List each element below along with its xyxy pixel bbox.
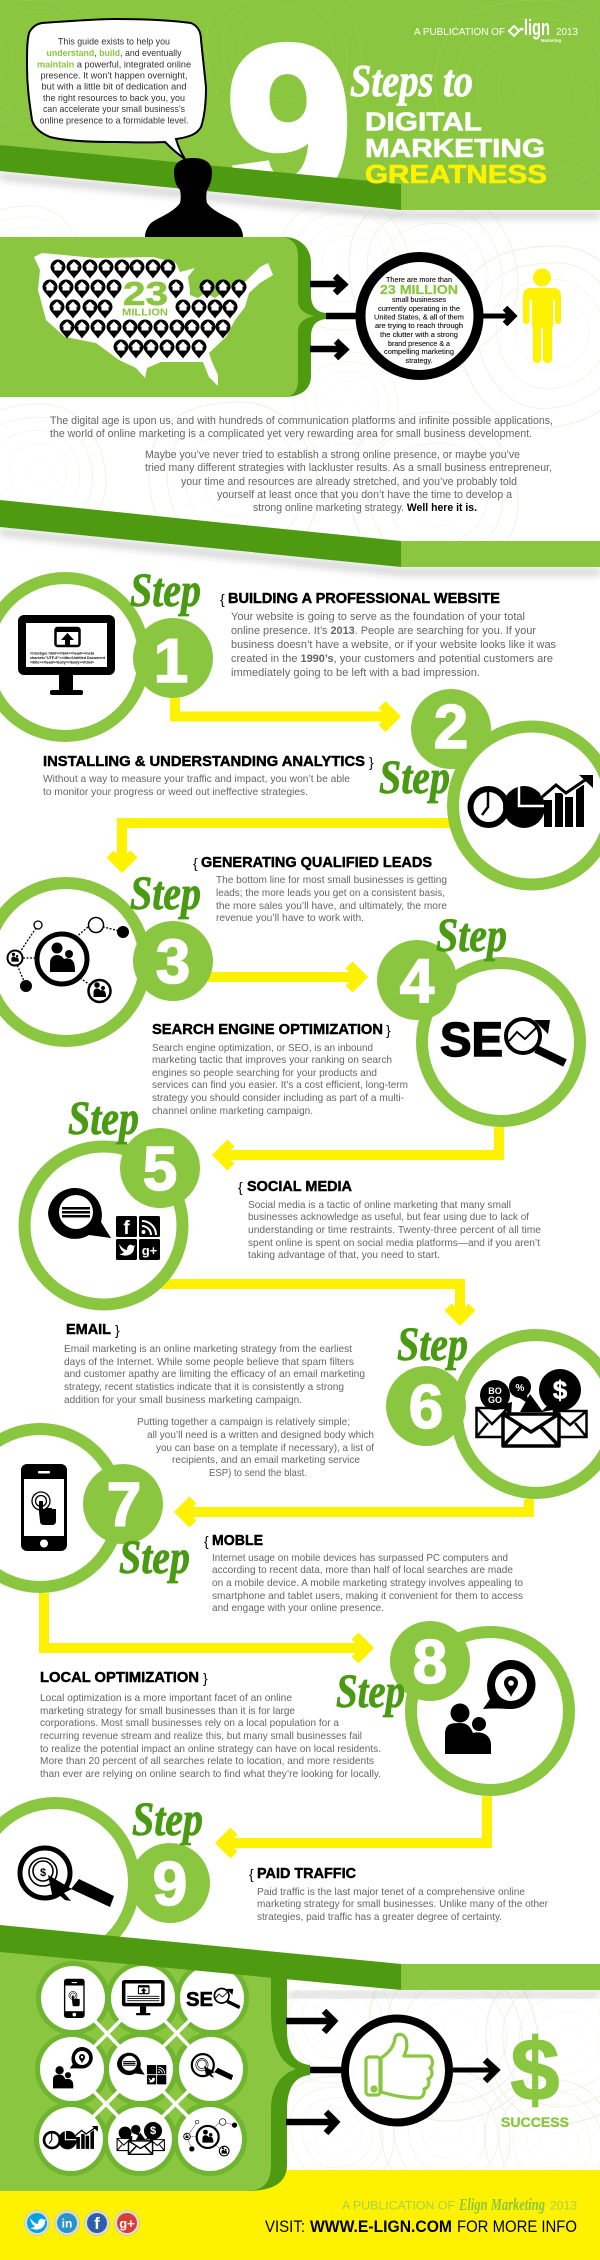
circle: step 4 <box>422 963 580 1121</box>
panel: 23 million small businesses <box>0 237 326 397</box>
script: Step: Step <box>119 1531 190 1584</box>
script: Step: Step <box>132 1793 203 1846</box>
body text: created in the 1990’s, your customers and potential customers are <box>231 653 553 665</box>
footer credit <box>342 2195 577 2214</box>
23 million label <box>122 275 168 318</box>
body text <box>64 1343 374 1479</box>
publication credit with logo: -lign <box>519 15 550 40</box>
body text: marketing strategy for small businesses. Unlike many of the other <box>257 1898 548 1910</box>
speech bubble: online presence to a formidable level. <box>40 116 188 126</box>
number badge 8 <box>390 1621 470 1701</box>
body text: leads; the more leads you get on a consistent basis, <box>216 887 445 899</box>
body text <box>248 1199 541 1261</box>
body text: ESP) to send the blast. <box>209 1467 307 1479</box>
step 1 <box>0 564 556 736</box>
map of USA <box>34 253 273 386</box>
number 1: 1 <box>154 627 188 696</box>
small icon: SEO <box>186 1988 240 2011</box>
footer credit: Elign Marketing <box>458 2195 545 2214</box>
social icons: in <box>62 2216 72 2230</box>
page background pattern <box>0 192 600 581</box>
small icon: SEO: SE <box>186 1988 213 2011</box>
body text: than ever are relying on online search to find what they’re looking for locally. <box>40 1768 381 1780</box>
body text: on a mobile device. A mobile marketing strategy involves appealing to <box>212 1577 523 1589</box>
icon: social media: f <box>123 1218 130 1239</box>
body text: taking advantage of that, you need to start. <box>248 1249 440 1261</box>
intro text: strong online marketing strategy. Well here it is. <box>253 502 477 514</box>
icon: social media <box>48 1188 160 1260</box>
body text: engines so people searching for your products and <box>152 1067 377 1079</box>
circle: step 6 <box>457 1335 600 1493</box>
step 5 <box>24 1092 541 1320</box>
speech bubble: This guide exists to help you <box>58 36 170 48</box>
arrow: thumbs up to success <box>453 2060 496 2081</box>
icon: analytics <box>470 775 593 828</box>
heading: social media: SOCIAL MEDIA <box>247 1178 352 1195</box>
icon: website monitor: charset="UTF-8"><title>Untitled Document <box>30 656 106 660</box>
number 9: 9 <box>153 1850 187 1919</box>
icon: email: % <box>516 1383 525 1394</box>
small icon: email <box>117 2122 164 2154</box>
circle: thumbs up <box>345 2018 449 2122</box>
body text: The bottom line for most small businesses is getting <box>216 874 447 886</box>
body text: immediately going to be left with a bad impression. <box>231 667 480 679</box>
header: green banner <box>0 0 600 210</box>
body text: Social media is a tactic of online marketing that many small <box>248 1199 511 1211</box>
small icon: social <box>117 2053 166 2084</box>
number badge 1 <box>133 618 213 698</box>
icon: email: BO <box>488 1386 502 1396</box>
icon: dollar sign: $ <box>511 2020 559 2119</box>
intro text: yourself at least once that you don’t have the time to develop a <box>217 489 512 501</box>
icon: thumbs up outline <box>366 2034 432 2098</box>
speech bubble <box>27 19 206 159</box>
lake <box>190 272 222 298</box>
body text: strategy, recent statistics indicate that it is consistently a strong <box>64 1381 344 1393</box>
body text <box>43 773 350 798</box>
callout circle: 23 million: brand presence & a <box>388 339 451 348</box>
intro text: The digital age is upon us, and with hundreds of communication platforms and infinite possible applications, <box>50 415 553 427</box>
icon: email <box>476 1369 586 1446</box>
intro text: Maybe you’ve never tried to establish a strong online presence, or maybe you’ve <box>145 449 520 461</box>
body text: Search engine optimization, or SEO, is an inbound <box>152 1042 373 1054</box>
number badge 2 <box>411 689 491 769</box>
body text: revenue you’ll have to work with. <box>216 912 364 924</box>
section band <box>0 500 600 567</box>
title: digital marketing greatness: MARKETING <box>365 133 545 163</box>
circle: step 2 <box>453 726 600 884</box>
icon: social media: g+ <box>142 1243 158 1258</box>
speech bubble: understand, build, and eventually <box>46 48 182 59</box>
icon: SEO magnifier <box>440 1014 565 1067</box>
location pins <box>42 260 246 358</box>
publication credit with logo: A PUBLICATION OF <box>414 26 505 38</box>
body text: addition for your small business marketing campaign. <box>64 1394 302 1406</box>
number 4: 4 <box>400 947 435 1016</box>
title: digital marketing greatness: GREATNESS <box>365 159 547 189</box>
icon: website monitor <box>18 615 115 695</box>
heading: local optimization: } <box>203 1670 208 1686</box>
title: digital marketing greatness: DIGITAL <box>365 106 482 136</box>
arrows: panel to circle <box>310 276 360 358</box>
icon: paid traffic <box>20 1848 114 1907</box>
speech bubble: maintain a powerful, integrated online <box>37 60 191 70</box>
script: Step: Step <box>68 1092 139 1145</box>
body text: according to recent data, more than half of local searches are made <box>212 1564 513 1576</box>
intro text: your time and resources are already stretched, and you’ve probably told <box>181 476 517 488</box>
number badge 4 <box>377 940 457 1020</box>
speech bubble: presence. It won’t happen overnight, <box>40 70 188 82</box>
body text <box>212 1552 523 1614</box>
callout circle: 23 million: United States, & all of them <box>374 312 464 322</box>
heading: email: EMAIL <box>66 1321 111 1338</box>
publication credit with logo: 2013 <box>556 26 578 38</box>
callout circle: 23 million: small businesses <box>392 295 446 304</box>
body text: and customer apathy are limiting the efficacy of an email marketing <box>64 1368 365 1380</box>
social icons: g+ <box>119 2216 135 2231</box>
panel: summary icons <box>0 1940 310 2191</box>
script: Step: Step <box>379 751 450 804</box>
lower band <box>0 1925 600 1990</box>
lattice lines <box>71 1998 212 2139</box>
small icon: network <box>184 2119 237 2156</box>
body text <box>257 1886 548 1923</box>
band shadow 3 <box>287 1992 600 1997</box>
arrow: step 8 to 9 <box>222 1796 487 1855</box>
intro text: tried many different strategies with lackluster results. As a small business entrepreneur, <box>145 462 552 474</box>
body text: strategy you should consider including as part of a multi- <box>152 1092 404 1104</box>
body text: Putting together a campaign is relatively simple; <box>137 1416 350 1428</box>
body text: strategies, paid traffic has a greater degree of certainty. <box>257 1911 502 1923</box>
circle: step 1 <box>0 578 144 736</box>
heading: mobile: { <box>204 1533 209 1549</box>
icon: mobile phone <box>21 1464 67 1551</box>
body text: Local optimization is a more important facet of an online <box>40 1692 292 1704</box>
body text: to realize the potential impact an online strategy can have on local residents. <box>40 1743 381 1755</box>
23 million label: 23 <box>123 275 168 312</box>
icon: email: GO <box>488 1395 502 1405</box>
number 6: 6 <box>409 1373 443 1442</box>
callout circle: 23 million: compelling marketing <box>384 347 454 356</box>
body text: online presence. It’s 2013. People are searching for you. If your <box>231 625 536 637</box>
icon: website monitor: <!doctype html><html><head><meta <box>30 652 95 656</box>
number badge 5 <box>120 1128 200 1208</box>
script: Step: Step <box>397 1318 468 1371</box>
small icon: local <box>53 2047 93 2088</box>
footer credit: 2013 <box>550 2198 577 2212</box>
small icon: email: $ <box>150 2125 156 2137</box>
number badge 9 <box>130 1843 210 1923</box>
number badge 3 <box>133 921 213 1001</box>
body text <box>231 611 556 679</box>
number 8: 8 <box>413 1628 447 1697</box>
body text: corporations. Most small businesses rely on a local population for a <box>40 1717 339 1729</box>
footer: visit link: WWW.E-LIGN.COM <box>310 2217 452 2236</box>
icon: person silhouette <box>145 158 243 237</box>
arrow: step 3 to 4 <box>208 965 362 989</box>
step 6 <box>64 1318 600 1524</box>
icon: local optimization <box>445 1660 535 1754</box>
pattern: success area background <box>287 1985 600 2170</box>
title: digital marketing greatness <box>365 106 547 189</box>
icon grid circles <box>39 1966 244 2171</box>
social icons <box>24 2210 140 2236</box>
step 2 <box>43 689 600 884</box>
footer: visit link <box>265 2217 577 2236</box>
body text <box>152 1042 408 1117</box>
body text: marketing tactic that improves your ranking on search <box>152 1054 392 1066</box>
step 9 <box>0 1793 548 1961</box>
number 5: 5 <box>143 1135 177 1204</box>
icon: website monitor: </title></head><body></body></html> <box>30 660 94 664</box>
heading: mobile: MOBLE <box>212 1532 263 1549</box>
small icon: monitor <box>122 1980 165 2015</box>
icon: paid traffic: $ <box>40 1867 46 1879</box>
body text: businesses acknowledge as useful, but fear using due to lack of <box>248 1211 529 1223</box>
publication credit with logo <box>414 15 578 43</box>
body text: Your website is going to serve as the foundation of your total <box>231 611 525 623</box>
body text: Internet usage on mobile devices has surpassed PC computers and <box>212 1552 508 1564</box>
circle: step 5 <box>24 1146 182 1304</box>
intro text: the world of online marketing is a complicated yet very rewarding area for small business development. <box>50 428 532 440</box>
body text: marketing strategy for small businesses than it is for large <box>40 1705 295 1717</box>
intro text <box>50 415 553 514</box>
callout circle: 23 million: There are more than <box>386 275 452 284</box>
heading: SEO: } <box>386 1022 391 1038</box>
arrow: step 4 to 5 <box>219 1127 499 1167</box>
body text <box>216 874 447 924</box>
callout circle: 23 million: the clutter with a strong <box>380 330 458 339</box>
body text: Paid traffic is the last major tenet of a comprehensive online <box>257 1886 525 1898</box>
title: Steps to: Steps to <box>350 55 473 106</box>
heading: local optimization: LOCAL OPTIMIZATION <box>40 1669 199 1686</box>
heading: analytics: } <box>369 754 374 770</box>
body text: business doesn’t have a website, or if your website looks like it was <box>231 639 556 651</box>
body text: the more sales you’ll have, and ultimately, the more <box>216 900 447 912</box>
speech bubble: can accelerate your small business’s <box>43 104 185 115</box>
step 3 <box>0 854 447 1041</box>
publication credit with logo: Marketing <box>541 38 561 43</box>
icon: yellow person <box>523 268 561 363</box>
social icons: f <box>94 2214 100 2233</box>
number badge 7 <box>83 1464 163 1544</box>
circle: step 7 <box>0 1429 119 1587</box>
heading: paid traffic: PAID TRAFFIC <box>257 1865 356 1882</box>
arrow: circle to person <box>480 308 513 324</box>
body text: services can find you easier. It’s a cost efficient, long-term <box>152 1079 408 1091</box>
arrow: step 2 to 3 <box>110 823 450 866</box>
body text: recipients, and an email marketing service <box>172 1454 360 1466</box>
step 7 <box>0 1429 523 1660</box>
icon grid rings <box>34 1961 249 2176</box>
body text: Without a way to measure your traffic and impact, you won’t be able <box>43 773 350 785</box>
icon: email: $ <box>553 1375 568 1405</box>
script: Step: Step <box>336 1665 405 1718</box>
arrows: panel to thumbs up <box>286 2011 345 2133</box>
body text: recurring revenue stream and realize this, but many small businesses fail <box>40 1730 362 1742</box>
heading: analytics: INSTALLING & UNDERSTANDING ANALYTICS <box>43 753 365 770</box>
title: big 9: 9 <box>226 0 352 251</box>
heading: leads: GENERATING QUALIFIED LEADS <box>201 854 432 871</box>
arrow: step 7 to 8 <box>44 1593 367 1660</box>
circle: step 9 <box>0 1803 134 1961</box>
icon: lead network <box>8 918 129 1002</box>
arrow: step 6 to 7 <box>181 1499 529 1524</box>
step 4 <box>152 909 580 1167</box>
script: Step: Step <box>436 909 507 962</box>
body text <box>40 1692 381 1780</box>
arrow: step 1 to 2 <box>175 698 395 728</box>
number badge 6 <box>386 1366 466 1446</box>
23 million label: MILLION <box>122 306 168 318</box>
heading: SEO: SEARCH ENGINE OPTIMIZATION <box>152 1021 383 1038</box>
body text: to monitor your progress or weed out ineffective strategies. <box>43 786 308 798</box>
band shadow <box>0 173 600 218</box>
callout circle: 23 million: currently operating in the <box>378 304 460 313</box>
body text: More than 20 percent of all searches relate to location, and more residents <box>40 1755 374 1767</box>
icon: SEO magnifier: SE <box>440 1014 503 1067</box>
footer: visit link: VISIT: <box>265 2217 305 2236</box>
body text: all you’ll need is a written and designed body which <box>147 1429 374 1441</box>
heading: social media: { <box>238 1179 243 1195</box>
heading: leads: { <box>193 855 198 871</box>
small icon: analytics <box>44 2126 98 2149</box>
arrow: step 5 to 6 <box>161 1284 472 1320</box>
small icon: paid <box>192 2054 233 2080</box>
band shadow 2 <box>0 529 600 575</box>
heading: email: } <box>115 1322 120 1338</box>
footer: yellow band <box>0 2170 600 2260</box>
step 8 <box>40 1621 569 1855</box>
number 7: 7 <box>107 1471 141 1540</box>
callout circle: 23 million: strategy. <box>406 356 432 365</box>
callout circle: 23 million <box>360 257 478 375</box>
speech bubble: the right resources to back you, you <box>43 93 185 104</box>
small icon: phone <box>64 1979 85 2018</box>
heading: paid traffic: { <box>249 1866 254 1882</box>
heading: building a professional website: BUILDING A PROFESSIONAL WEBSITE <box>228 590 500 607</box>
script: Step: Step <box>130 564 201 617</box>
callout circle: 23 million: are trying to reach through <box>375 321 463 330</box>
body text: you can base on a template if necessary), a list of <box>156 1442 374 1454</box>
body text: Email marketing is an online marketing strategy from the earliest <box>64 1343 352 1355</box>
number 3: 3 <box>156 928 190 997</box>
circle: step 3 <box>0 883 145 1041</box>
body text: and engage with your online presence. <box>212 1602 384 1614</box>
circle: step 8 <box>411 1632 569 1790</box>
heading: building a professional website: { <box>220 591 225 607</box>
speech bubble: but with a little bit of dedication and <box>42 82 186 92</box>
body text: understanding or time restraints. Twenty-three percent of all time <box>248 1224 541 1236</box>
body text: spent online is spent on social media platforms—and if you aren’t <box>248 1237 540 1249</box>
footer credit: A PUBLICATION OF <box>342 2198 455 2212</box>
footer: visit link: FOR MORE INFO <box>457 2217 577 2236</box>
body text: smartphone and tablet users, making it convenient for them to access <box>212 1590 523 1602</box>
label: success: SUCCESS <box>501 2114 569 2130</box>
callout circle: 23 million: 23 MILLION <box>380 283 458 297</box>
body text: days of the Internet. While some people believe that spam filters <box>64 1356 354 1368</box>
header band <box>0 145 600 210</box>
script: Step: Step <box>130 867 201 920</box>
body text: channel online marketing campaign. <box>152 1105 313 1117</box>
number 2: 2 <box>434 693 468 762</box>
